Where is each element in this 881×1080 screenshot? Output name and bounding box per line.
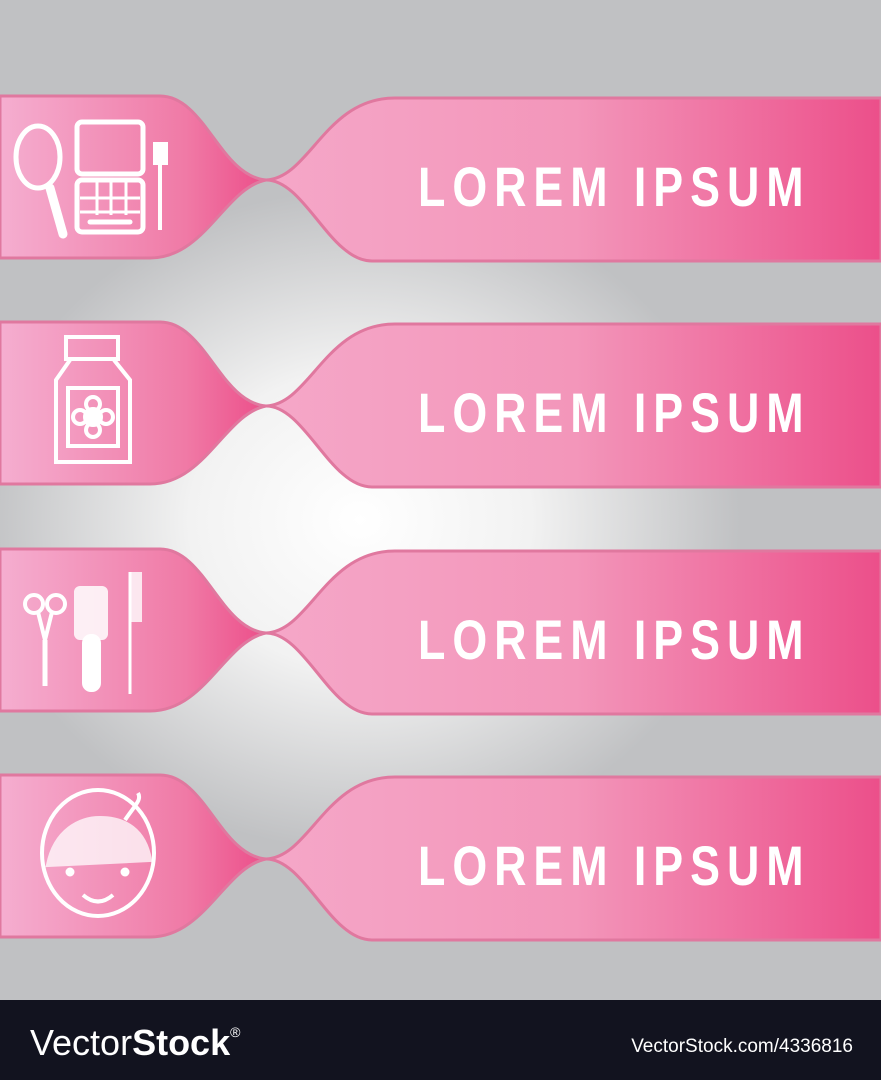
- footer logo: ®: [230, 1024, 241, 1040]
- panel: band 2 perfume: [0, 322, 881, 487]
- icon: scissors brush comb: [25, 572, 142, 694]
- icon: mirror palette mascara: [16, 122, 168, 234]
- panel: band 1 makeup: [0, 96, 881, 261]
- footer: [0, 1000, 881, 1080]
- icon: perfume bottle: [56, 337, 130, 462]
- footer logo: VectorStock: [30, 1022, 230, 1063]
- text: band 3: LOREM IPSUM: [418, 608, 804, 671]
- panel: band 4 face: [0, 775, 881, 940]
- footer url: VectorStock.com/4336816: [631, 1036, 853, 1057]
- text: band 2: LOREM IPSUM: [418, 381, 804, 444]
- text: band 1: LOREM IPSUM: [418, 155, 804, 218]
- panel: band 3 hair tools: [0, 549, 881, 714]
- text: band 4: LOREM IPSUM: [418, 834, 804, 897]
- icon: girl face: [42, 790, 154, 916]
